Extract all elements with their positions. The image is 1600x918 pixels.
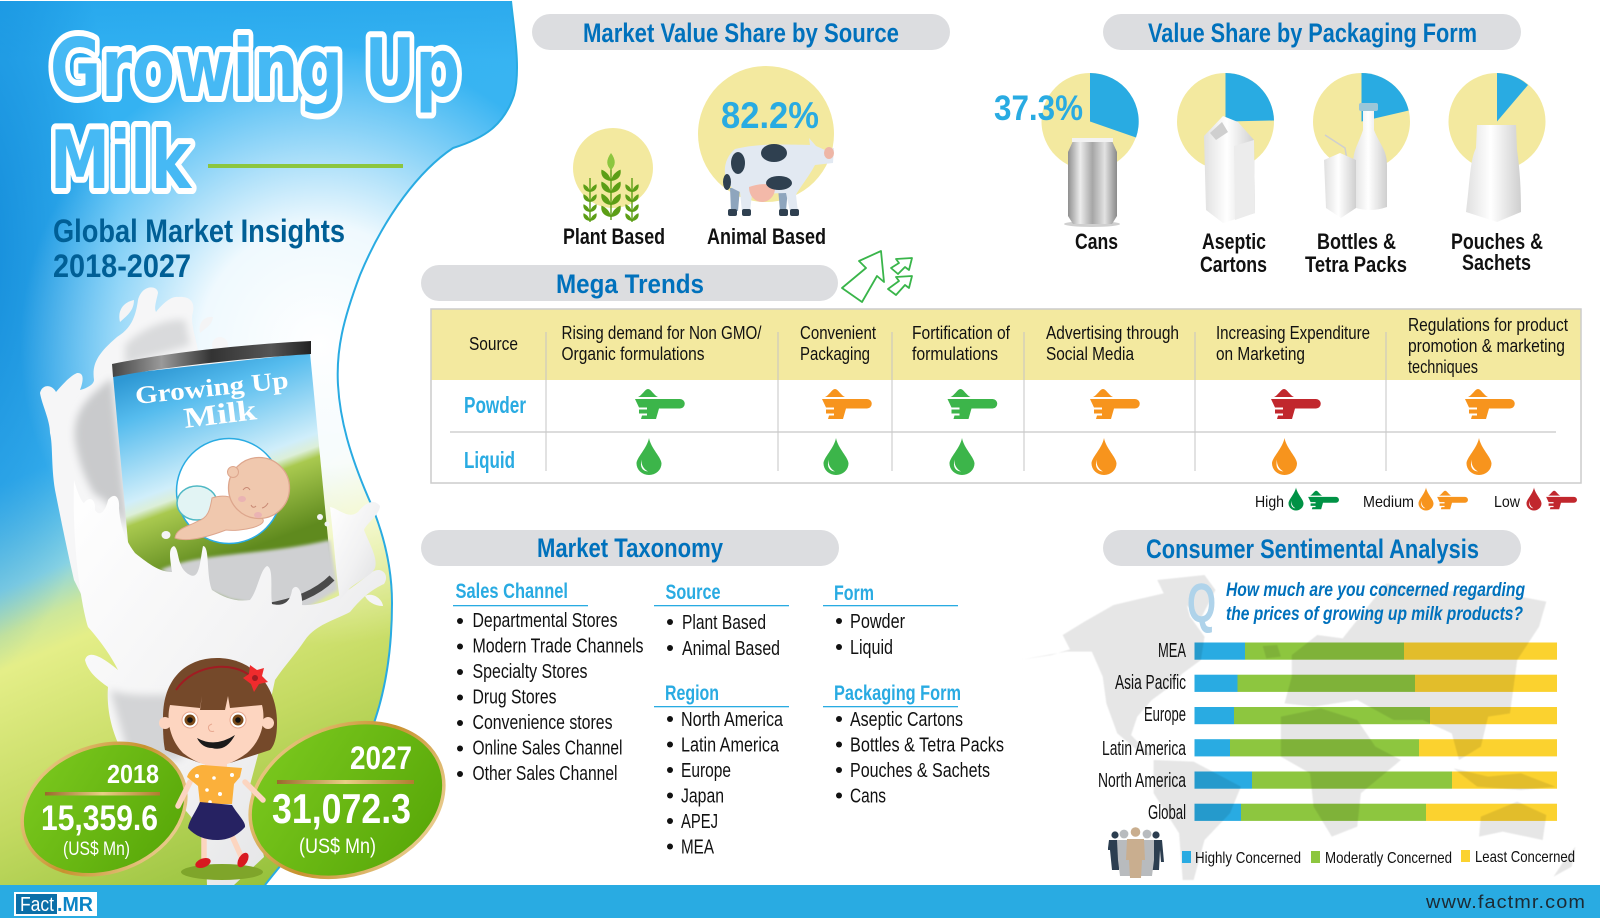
value oval 2027: (US$ Mn) [299, 835, 376, 858]
legend: rating: Medium [1363, 494, 1414, 511]
heading: value share by packaging form: Value Share by Packaging Form [1148, 18, 1477, 48]
taxonomy: source: Plant Based [682, 612, 766, 634]
icon: cow [723, 138, 834, 216]
website: www.factmr.com [1425, 892, 1586, 912]
taxonomy: sales channel: Modern Trade Channels [472, 636, 644, 658]
question [1187, 571, 1525, 634]
milk shading front [110, 690, 200, 760]
table column headers: on Marketing [1216, 344, 1305, 364]
bar labels: Europe [1144, 704, 1186, 726]
bar labels: North America [1098, 770, 1187, 792]
baby badge [175, 438, 290, 544]
subtitle [53, 213, 345, 284]
icon: bottle and tetra pack [1324, 103, 1387, 218]
pie: aseptic cartons [1177, 73, 1274, 170]
table column headers: Advertising through [1046, 323, 1179, 343]
taxonomy: sales channel: Other Sales Channel [472, 763, 618, 785]
liquid rating icons [636, 438, 1492, 475]
subtitle: Global Market Insights [53, 213, 345, 249]
question: Q [1187, 571, 1216, 634]
icon: wheat [583, 153, 639, 222]
icon: trend arrows [842, 251, 912, 302]
table column headers: promotion & marketing [1408, 336, 1565, 356]
footer bar [0, 885, 1600, 918]
title rule [208, 164, 403, 168]
taxonomy: region: Latin America [681, 734, 780, 756]
packaging labels: Aseptic [1202, 229, 1266, 254]
taxonomy: packaging form: Aseptic Cartons [850, 709, 963, 731]
packaging labels: Tetra Packs [1305, 252, 1407, 277]
taxonomy: sales channel: Convenience stores [472, 712, 612, 734]
legend: rating: High [1255, 494, 1284, 511]
bar labels: Global [1148, 802, 1186, 824]
world map [1023, 575, 1575, 880]
legend: concern: Highly Concerned [1195, 850, 1301, 867]
table column headers: Increasing Expenditure [1216, 323, 1370, 343]
plant based circle [573, 128, 653, 208]
panel: packaging form [994, 73, 1546, 277]
heading: consumer sentimental analysis: Consumer Sentimental Analysis [1146, 534, 1479, 564]
table column headers: Packaging [800, 344, 870, 364]
hero background [0, 0, 540, 900]
question: the prices of growing up milk products? [1226, 603, 1523, 625]
logo: .MR [57, 894, 94, 916]
subtitle: 2018-2027 [53, 248, 191, 284]
logo [14, 892, 97, 916]
milk splash right [330, 502, 380, 600]
value oval 2027 [228, 696, 466, 904]
pie: cans [1042, 73, 1139, 170]
panel: source share [563, 66, 834, 249]
value oval 2027: 31,072.3 [272, 785, 411, 832]
table column headers: Regulations for product [1408, 315, 1568, 335]
pie: pouches and sachets [1448, 73, 1546, 170]
table column headers: Organic formulations [562, 344, 704, 364]
taxonomy: source: Source [666, 581, 720, 604]
taxonomy: sales channel: Online Sales Channel [472, 738, 622, 760]
milk shading [75, 378, 128, 530]
panel: consumer sentiment [1023, 571, 1575, 880]
bar labels [1098, 640, 1187, 824]
taxonomy: packaging form: Bottles & Tetra Packs [850, 734, 1004, 756]
panel: taxonomy [453, 580, 1004, 858]
taxonomy: sales channel [453, 580, 644, 785]
table column headers [469, 315, 1568, 377]
table frame [431, 309, 1581, 483]
taxonomy: form: Powder [850, 611, 905, 633]
table column headers: Social Media [1046, 344, 1135, 364]
value oval 2018: (US$ Mn) [63, 839, 130, 860]
title: Milk [50, 114, 192, 207]
taxonomy: sales channel: Sales Channel [456, 580, 568, 603]
table column headers: Convenient [800, 323, 876, 343]
row label: powder: Powder [464, 392, 526, 418]
can label text: Growing Up [134, 367, 290, 410]
icon: pouch [1466, 125, 1521, 222]
taxonomy: source: Animal Based [682, 638, 780, 660]
heading: value share by packaging form [1103, 14, 1521, 50]
question: How much are you concerned regarding [1226, 579, 1525, 601]
packaging labels: Sachets [1462, 250, 1531, 275]
table column headers: Rising demand for Non GMO/ [562, 323, 762, 343]
powder rating icons [635, 389, 1515, 419]
pie: bottles and tetra packs [1313, 73, 1410, 170]
heading: mega trends: Mega Trends [556, 269, 704, 299]
icon: people [1108, 827, 1164, 878]
milk can [112, 341, 333, 620]
plant based label: Plant Based [563, 224, 665, 249]
animal based label: Animal Based [707, 224, 826, 249]
packaging labels: Pouches & [1451, 229, 1543, 254]
milk inner pool [160, 540, 338, 612]
title: Growing Up [50, 22, 460, 115]
legend: concern: Least Concerned [1475, 849, 1575, 866]
icon: carton [1204, 116, 1255, 223]
heading: consumer sentimental analysis [1103, 530, 1521, 566]
value oval 2018: 2018 [107, 759, 159, 789]
taxonomy: region: Region [665, 682, 719, 705]
taxonomy: sales channel: Drug Stores [472, 686, 556, 708]
panel: mega trends table [431, 309, 1581, 483]
heading: mega trends [421, 265, 838, 301]
milk splash behind can [40, 287, 250, 600]
logo: Fact [20, 894, 54, 916]
taxonomy: sales channel: Departmental Stores [472, 610, 618, 632]
can base rim [265, 578, 332, 607]
packaging labels [1075, 229, 1543, 277]
taxonomy: packaging form: Pouches & Sachets [850, 760, 990, 782]
cans share value: 37.3% [994, 89, 1083, 128]
packaging labels: Bottles & [1317, 229, 1396, 254]
taxonomy: packaging form: Packaging Form [834, 682, 961, 705]
legend: concern: Moderatly Concerned [1325, 850, 1452, 867]
girl character [159, 658, 277, 880]
milk crown front [74, 480, 386, 885]
taxonomy: region: North America [681, 709, 784, 731]
taxonomy: form [823, 582, 958, 659]
table column headers: techniques [1408, 357, 1478, 377]
row label: liquid: Liquid [464, 447, 515, 473]
packaging labels: Cans [1075, 229, 1118, 254]
value oval 2027: 2027 [350, 740, 412, 776]
bar labels: Asia Pacific [1115, 672, 1186, 694]
bar labels: Latin America [1102, 738, 1187, 760]
heading: market taxonomy [421, 530, 839, 566]
table header band [431, 309, 1581, 380]
taxonomy: form: Form [834, 582, 874, 605]
taxonomy: region: Japan [681, 786, 724, 808]
legend: rating [1255, 488, 1577, 511]
milk drops [119, 300, 383, 606]
heading: market value share by source: Market Value Share by Source [583, 18, 899, 48]
taxonomy: source [654, 581, 789, 660]
animal share value: 82.2% [721, 95, 819, 136]
title [50, 22, 460, 207]
taxonomy: sales channel: Specialty Stores [472, 661, 588, 683]
left hero panel [0, 0, 540, 904]
taxonomy: region [654, 682, 789, 858]
can label text: Milk [182, 394, 259, 435]
taxonomy: region: APEJ [681, 811, 718, 833]
taxonomy: form: Liquid [850, 637, 893, 659]
can label text [134, 367, 290, 435]
taxonomy: region: MEA [681, 836, 714, 858]
bar labels: MEA [1158, 640, 1186, 662]
icon: can [1064, 138, 1120, 227]
taxonomy: region: Europe [681, 760, 731, 782]
legend: concern [1182, 849, 1575, 867]
taxonomy: packaging form: Cans [850, 786, 886, 808]
table column headers: Fortification of [912, 323, 1011, 343]
value oval 2018 [4, 721, 204, 897]
animal based circle [698, 66, 834, 202]
taxonomy: packaging form [823, 682, 1004, 808]
legend: rating: Low [1494, 494, 1520, 511]
value oval 2018: 15,359.6 [41, 799, 158, 838]
table column headers: Source [469, 334, 518, 354]
packaging labels: Cartons [1200, 252, 1267, 277]
chart: concern stacked bars [1194, 642, 1557, 821]
table column headers: formulations [912, 344, 998, 364]
heading: market taxonomy: Market Taxonomy [537, 533, 723, 563]
